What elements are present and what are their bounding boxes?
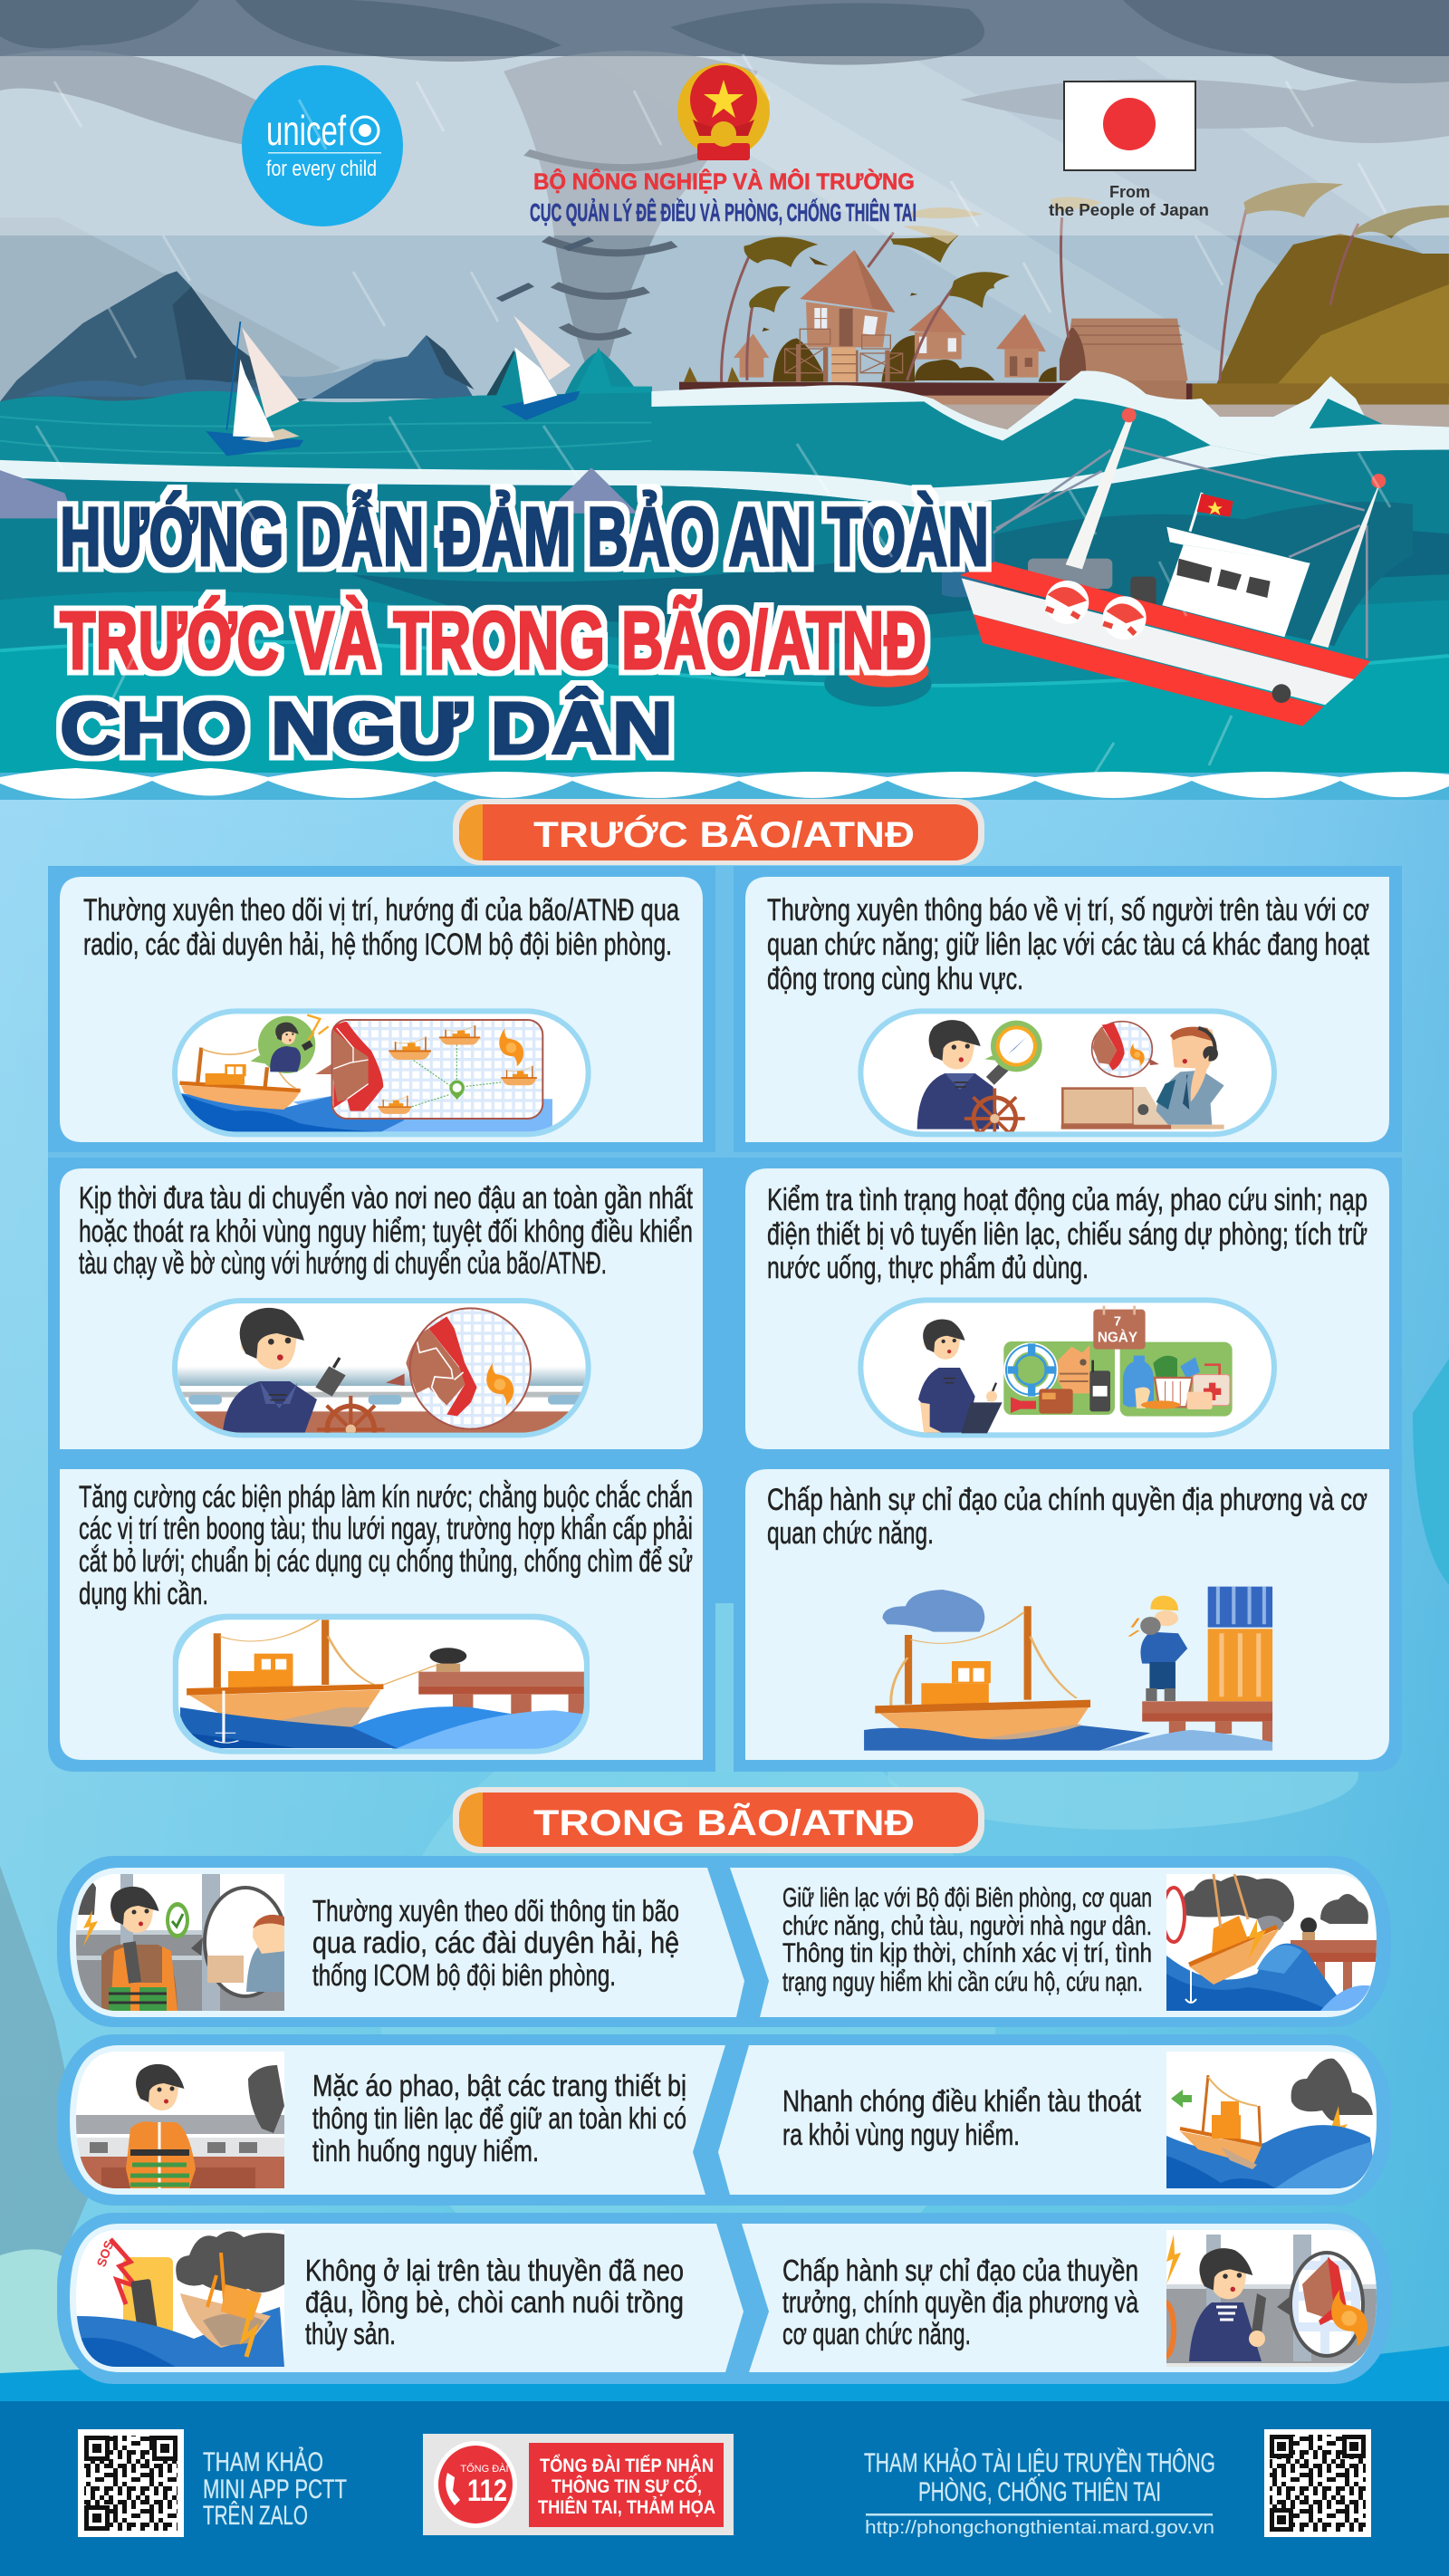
row 2 right text xyxy=(782,2084,1141,2151)
row 3 left image: SOS and sinking boat: SOS xyxy=(93,2238,117,2269)
row 3 left text: đậu, lồng bè, chòi canh nuôi trồng xyxy=(305,2285,684,2319)
from the people of Japan: the People of Japan xyxy=(1049,201,1209,219)
card 3 illustration: sailor with radio and storm map xyxy=(172,1298,591,1438)
card 4 illustration: sailor and 7-day supplies xyxy=(860,1300,1274,1435)
section heading: before storm xyxy=(453,799,984,865)
mini app caption: TRÊN ZALO xyxy=(203,2501,308,2531)
storm sky xyxy=(0,0,1449,426)
QR code: website xyxy=(1264,2429,1371,2537)
from the people of Japan xyxy=(1049,183,1209,219)
card 2 text xyxy=(767,893,1369,996)
card 5 illustration: moored boat xyxy=(173,1614,591,1754)
life ring xyxy=(824,655,932,706)
from the people of Japan: From xyxy=(1109,183,1150,201)
card 1 illustration: boat and radar map xyxy=(175,1011,589,1135)
row 2 left text: tình huống nguy hiểm. xyxy=(312,2134,539,2167)
row 1 left text: qua radio, các đài duyên hải, hệ xyxy=(312,1926,679,1959)
hut: middle xyxy=(908,305,966,360)
row 3 left text xyxy=(305,2254,684,2350)
QR code: mini app xyxy=(78,2429,184,2537)
hut: large stilt house xyxy=(785,250,903,382)
main title: HƯỚNG DẪN ĐẢM BẢO AN TOÀN xyxy=(60,490,989,583)
Vietnam national emblem xyxy=(677,63,770,160)
main title: TRƯỚC VÀ TRONG BÃO/ATNĐ xyxy=(60,595,926,687)
palm trees xyxy=(684,183,1449,382)
card 2 illustration: sailor and radio operator xyxy=(860,1011,1274,1149)
card 6: follow authority instructions xyxy=(745,1469,1389,1760)
card 5 text: dụng khi cần. xyxy=(79,1577,208,1611)
card 4: check equipment and supplies xyxy=(745,1168,1389,1449)
card 4 illustration: sailor and 7-day supplies: 7 xyxy=(1114,1314,1121,1329)
card 4 illustration: sailor and 7-day supplies: NGÀY xyxy=(1098,1331,1137,1346)
mini app caption: MINI APP PCTT xyxy=(203,2475,347,2504)
row 3 right text xyxy=(782,2254,1138,2350)
main title: CHO NGƯ DÂN xyxy=(60,687,673,770)
hero illustration: storm scene xyxy=(0,0,1449,793)
card 5 text: các vị trí trên boong tàu; thu lưới ngay, trường hợp khẩn cấp phải xyxy=(79,1512,693,1546)
ministry name: CỤC QUẢN LÝ ĐÊ ĐIỀU VÀ PHÒNG, CHỐNG THIÊN TAI xyxy=(530,197,916,226)
row 3 right text: cơ quan chức năng. xyxy=(782,2317,971,2350)
unicef logo: unicef xyxy=(266,107,346,154)
main title xyxy=(60,490,989,770)
row 2 left text xyxy=(312,2069,686,2167)
panel frame: before storm cards xyxy=(48,866,1402,1772)
card 4 text xyxy=(767,1183,1367,1285)
island with huts and palm trees xyxy=(679,183,1449,435)
header band overlay xyxy=(0,56,1449,235)
reference materials caption xyxy=(864,2447,1215,2538)
ministry name: BỘ NÔNG NGHIỆP VÀ MÔI TRƯỜNG xyxy=(533,168,915,195)
row 1 right text: trạng nguy hiểm khi cần cứu hộ, cứu nạn. xyxy=(782,1967,1143,1997)
unicef logo: for every child xyxy=(266,157,377,181)
card 5: secure the vessel xyxy=(60,1469,703,1760)
row 1 right text xyxy=(782,1883,1152,1997)
row 2 right text: Nhanh chóng điều khiển tàu thoát xyxy=(782,2084,1141,2118)
sea waves behind title xyxy=(0,370,1449,793)
row 3 left text: thủy sản. xyxy=(305,2317,396,2350)
row 1 left image: sailor in life vest xyxy=(76,1874,286,2011)
row 2 left image: man wearing life jacket xyxy=(76,2052,284,2188)
card 5 text xyxy=(79,1480,693,1611)
row 2 left text: thông tin liên lạc để giữ an toàn khi có xyxy=(312,2101,686,2135)
row 2 right image: boat escaping storm xyxy=(1166,2052,1377,2188)
hotline 112 badge: 112 xyxy=(467,2474,507,2508)
card 3 text: Kịp thời đưa tàu di chuyển vào nơi neo đậu an toàn gần nhất xyxy=(79,1181,693,1216)
mini app caption xyxy=(203,2446,347,2531)
row 1 left text: Thường xuyên theo dõi thông tin bão xyxy=(312,1894,679,1927)
row 1: during storm xyxy=(57,1856,1391,2027)
row 2 left text: Mặc áo phao, bật các trang thiết bị xyxy=(312,2069,686,2102)
row 3 right text: trưởng, chính quyền địa phương và xyxy=(782,2285,1138,2319)
ministry name xyxy=(530,168,916,226)
distant mountains and sailboats xyxy=(0,271,652,477)
row 1 right image: boat in distress xyxy=(1163,1874,1377,2011)
card 6 illustration: boat, pier and officer with megaphone xyxy=(864,1587,1272,1751)
hotline 112 badge: THÔNG TIN SỰ CỐ, xyxy=(552,2475,702,2497)
unicef logo xyxy=(242,65,403,226)
reference materials caption: THAM KHẢO TÀI LIỆU TRUYỀN THÔNG xyxy=(864,2447,1215,2478)
row 1 left text xyxy=(312,1894,679,1992)
hut: small left xyxy=(734,333,769,378)
fishing boat xyxy=(942,408,1413,726)
card 3 text xyxy=(79,1181,693,1281)
card 3 text: hoặc thoát ra khỏi vùng nguy hiểm; tuyệt đối không điều khiển xyxy=(79,1215,693,1249)
card 4 text: nước uống, thực phẩm đủ dùng. xyxy=(767,1251,1089,1285)
footer band xyxy=(0,2401,1449,2576)
section heading: before storm: TRƯỚC BÃO/ATNĐ xyxy=(533,813,915,855)
hotline 112 badge: TỔNG ĐÀI TIẾP NHẬN xyxy=(540,2455,714,2476)
mini app caption: THAM KHẢO xyxy=(203,2446,323,2477)
section heading: during storm: TRONG BÃO/ATNĐ xyxy=(533,1802,915,1843)
row 1 right text: chức năng, chủ tàu, người nhà ngư dân. xyxy=(782,1911,1152,1941)
section heading: during storm xyxy=(453,1787,984,1853)
card 1 text xyxy=(83,893,679,962)
hotline 112 badge: TỔNG ĐÀI xyxy=(460,2463,509,2475)
row 2: during storm xyxy=(57,2034,1391,2206)
row 1 left text: thống ICOM bộ đội biên phòng. xyxy=(312,1958,616,1992)
row 1 right text: Giữ liên lạc với Bộ đội Biên phòng, cơ quan xyxy=(782,1883,1152,1913)
card 1: follow storm position xyxy=(60,877,703,1142)
card 5 text: Tăng cường các biện pháp làm kín nước; chằng buộc chắc chắn xyxy=(79,1480,693,1514)
row 2 right text: ra khỏi vùng nguy hiểm. xyxy=(782,2118,1020,2151)
card 2 text: động trong cùng khu vực. xyxy=(767,962,1023,996)
row 1 right text: Thông tin kịp thời, chính xác vị trí, tình xyxy=(782,1938,1152,1968)
card 1 text: radio, các đài duyên hải, hệ thống ICOM bộ đội biên phòng. xyxy=(83,928,672,962)
card 3: move boat to safe shelter xyxy=(60,1168,703,1464)
hotline 112 badge xyxy=(423,2434,734,2535)
foam wave divider xyxy=(0,768,1449,800)
card 5 text: cắt bỏ lưới; chuẩn bị các dụng cụ chống thủng, chống chìm để sử xyxy=(79,1544,693,1579)
hut: right xyxy=(996,314,1046,378)
hut: big roof right xyxy=(1060,319,1188,410)
reference materials caption: PHÒNG, CHỐNG THIÊN TAI xyxy=(918,2476,1161,2507)
row 3 left text: Không ở lại trên tàu thuyền đã neo xyxy=(305,2254,684,2287)
rain streaks xyxy=(36,54,1390,779)
hotline 112 badge: THIÊN TAI, THẢM HỌA xyxy=(538,2496,715,2518)
card 6 text xyxy=(767,1483,1367,1551)
row 3 right image: sailor checking storm map xyxy=(1156,2230,1377,2367)
page background xyxy=(0,770,1449,2409)
card 1 text: Thường xuyên theo dõi vị trí, hướng đi của bão/ATNĐ qua xyxy=(83,893,679,928)
card 6 text: quan chức năng. xyxy=(767,1516,934,1551)
card 2: report position and crew xyxy=(745,877,1389,1149)
reference materials caption: http://phongchongthientai.mard.gov.vn xyxy=(865,2518,1214,2538)
row 3: during storm xyxy=(57,2213,1391,2384)
row 3 left image: SOS and sinking boat xyxy=(76,2230,284,2367)
card 3 text: tàu chạy về bờ cùng với hướng di chuyển của bão/ATNĐ. xyxy=(79,1246,607,1281)
Japan flag xyxy=(1064,82,1195,170)
row 3 right text: Chấp hành sự chỉ đạo của thuyền xyxy=(782,2254,1138,2287)
tornado xyxy=(499,51,758,401)
